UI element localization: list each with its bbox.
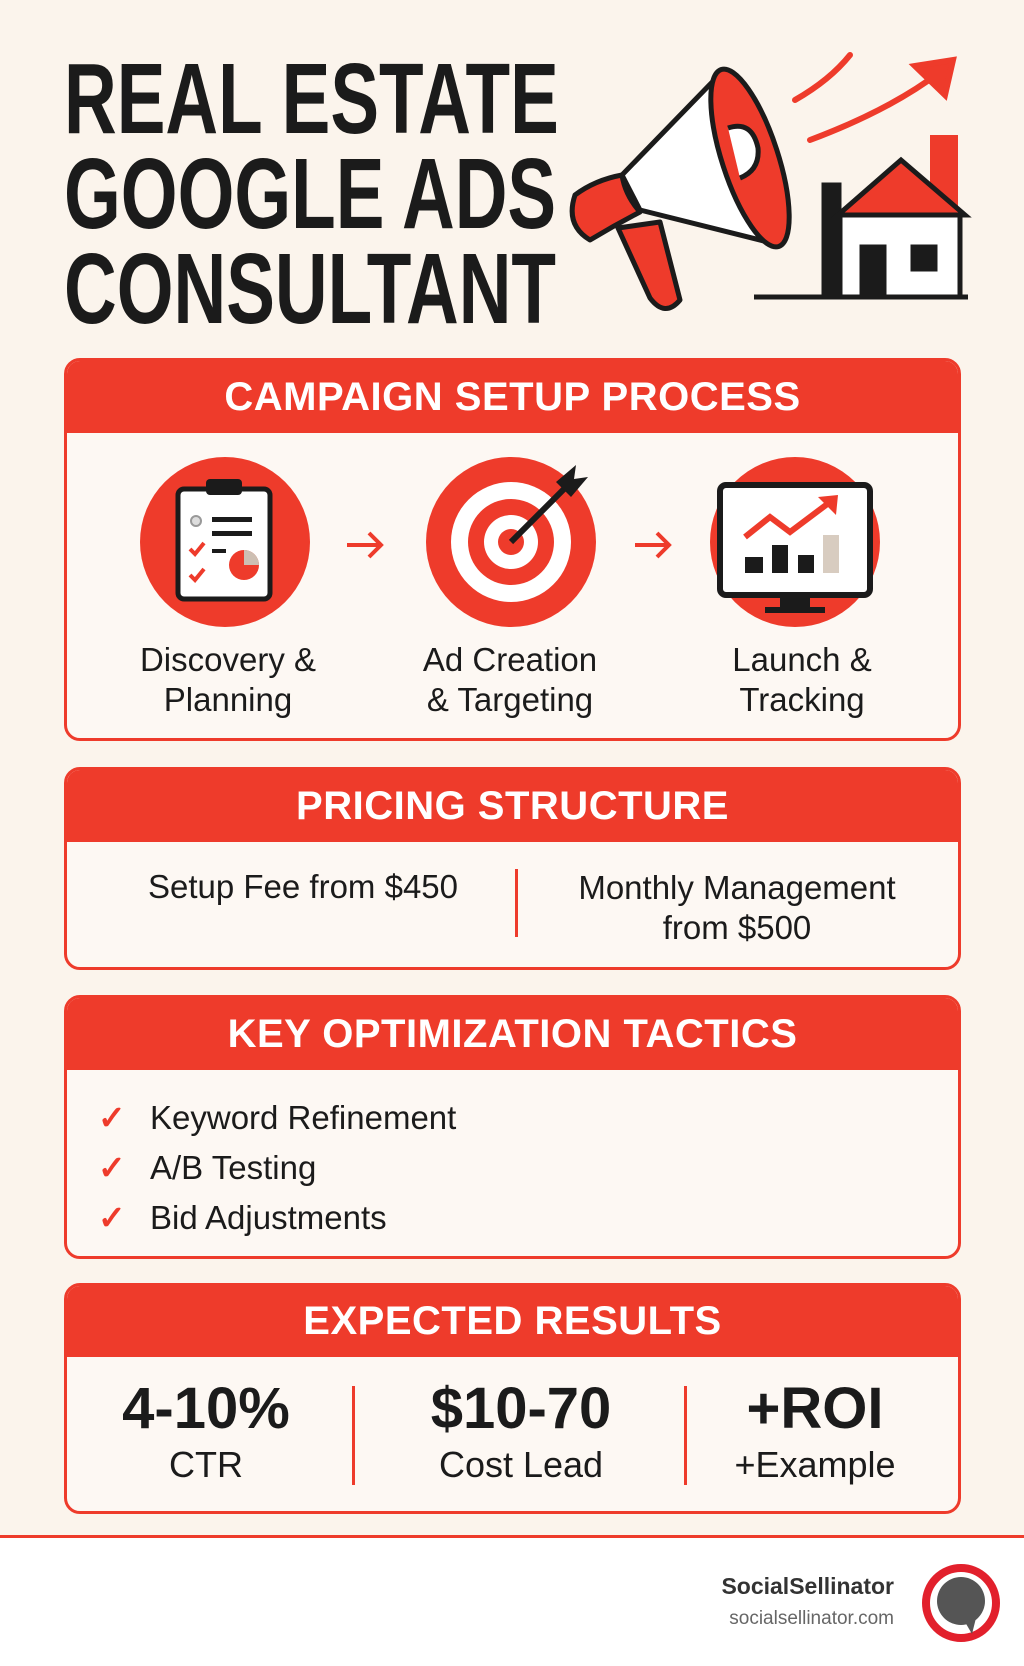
heading: expected results: EXPECTED RESULTS	[303, 1299, 722, 1343]
list: tactics	[98, 1099, 456, 1236]
heading: campaign setup process	[67, 361, 958, 433]
footer brand text: socialsellinator.com	[729, 1608, 894, 1629]
stat: cost lead: Cost Lead	[439, 1444, 603, 1485]
icon: megaphone	[572, 61, 805, 309]
stat: CTR: CTR	[169, 1444, 243, 1485]
title: REAL ESTATE	[64, 43, 559, 155]
text: monthly management	[578, 869, 896, 946]
icon: house	[754, 135, 968, 297]
footer	[0, 1535, 1024, 1666]
heading: pricing structure	[67, 770, 958, 842]
footer brand text: SocialSellinator	[721, 1573, 894, 1599]
label: launch & tracking: Launch &	[732, 641, 872, 678]
heading: key optimization tactics	[67, 998, 958, 1070]
stat: ROI: +Example	[734, 1444, 896, 1485]
heading: key optimization tactics: KEY OPTIMIZATION TACTICS	[228, 1012, 797, 1056]
text: monthly management: from $500	[663, 909, 811, 946]
panel: campaign setup process	[64, 358, 961, 741]
arrow 2	[635, 532, 672, 558]
label: launch & tracking	[732, 641, 872, 718]
icon: growth arrows	[795, 55, 953, 140]
stat: ROI	[734, 1376, 896, 1485]
text: monthly management: Monthly Management	[578, 869, 896, 906]
title	[64, 43, 559, 345]
text: setup fee: Setup Fee from $450	[148, 868, 458, 905]
panel: pricing structure	[64, 767, 961, 970]
heading: pricing structure: PRICING STRUCTURE	[296, 784, 729, 828]
title: GOOGLE ADS	[64, 138, 556, 250]
label: launch & tracking: Tracking	[739, 681, 865, 718]
list: tactics: ✓	[98, 1199, 126, 1236]
stat: ROI: +ROI	[746, 1376, 884, 1441]
icon: monitor chart	[710, 457, 880, 627]
label: ad creation & targeting: Ad Creation	[423, 641, 597, 678]
list: tactics: Keyword Refinement	[150, 1099, 456, 1136]
list: tactics: ✓	[98, 1099, 126, 1136]
list: tactics: Bid Adjustments	[150, 1199, 387, 1236]
label: discovery & planning: Discovery &	[140, 641, 316, 678]
arrow 1	[347, 532, 384, 558]
title: CONSULTANT	[64, 233, 556, 345]
heading: expected results	[67, 1286, 958, 1357]
icon: clipboard	[140, 457, 310, 627]
stat: cost lead	[431, 1376, 611, 1485]
panel: key optimization tactics	[64, 995, 961, 1259]
label: ad creation & targeting: & Targeting	[427, 681, 593, 718]
icon: target	[426, 457, 596, 627]
label: discovery & planning: Planning	[164, 681, 292, 718]
stat: CTR: 4-10%	[122, 1376, 290, 1441]
label: ad creation & targeting	[423, 641, 597, 718]
stat: CTR	[122, 1376, 290, 1485]
stat: cost lead: $10-70	[431, 1376, 611, 1441]
panel: expected results	[64, 1283, 961, 1514]
list: tactics: ✓	[98, 1149, 126, 1186]
list: tactics: A/B Testing	[150, 1149, 316, 1186]
icon: logo	[922, 1564, 1000, 1642]
heading: campaign setup process: CAMPAIGN SETUP PROCESS	[224, 375, 801, 419]
footer brand text	[721, 1573, 894, 1629]
label: discovery & planning	[140, 641, 316, 718]
hero illustration: megaphone and house	[570, 52, 972, 311]
